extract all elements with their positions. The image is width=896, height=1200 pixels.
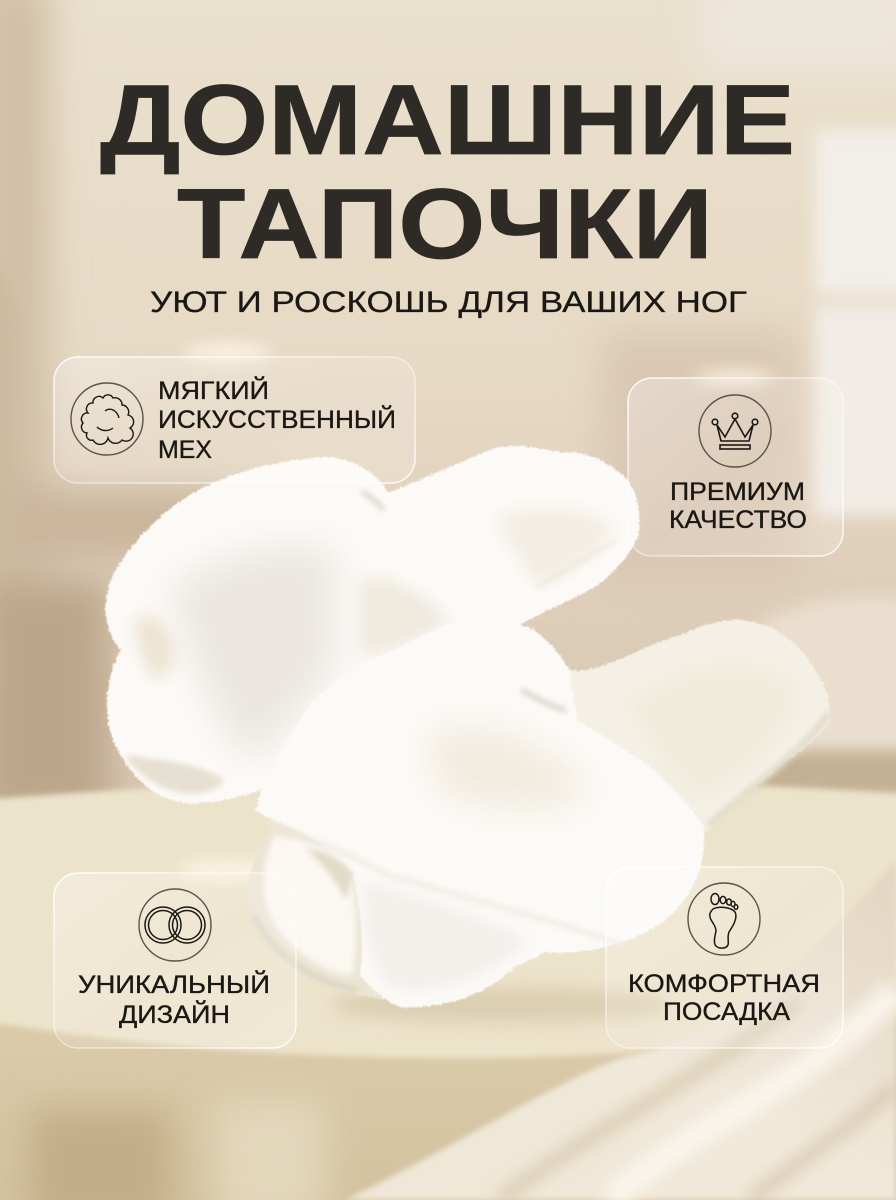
label: unique design (78, 969, 270, 1029)
back slipper footbed (495, 508, 612, 587)
icon: rings (139, 889, 211, 961)
back slipper toe shadow (136, 616, 175, 678)
back slipper textured strap (170, 546, 335, 760)
label: soft faux fur: ИСКУССТВЕННЫЙ (158, 404, 396, 434)
panel: unique design (54, 873, 296, 1048)
front slipper toe rim (254, 915, 358, 990)
icon: crown (699, 395, 771, 467)
label: unique design: ДИЗАЙН (119, 999, 230, 1029)
product: back slipper (106, 446, 640, 803)
front slipper toe gap (305, 848, 353, 900)
table surface (0, 780, 896, 1058)
back slipper sole (125, 755, 225, 794)
back slipper silhouette (106, 446, 640, 803)
label: comfortable fit (628, 970, 820, 1026)
label: soft faux fur: МЕХ (158, 436, 212, 464)
back slipper knot shadow (362, 492, 384, 510)
title (100, 64, 795, 279)
panel: soft faux fur (54, 357, 415, 483)
front slipper crossed straps (256, 620, 704, 1007)
front slipper knot shadow (522, 690, 566, 711)
title: ДОМАШНИЕ (100, 64, 795, 175)
front slipper footbed texture (630, 665, 800, 800)
draped cloth (345, 860, 896, 1200)
panel: premium quality (628, 378, 843, 556)
label: premium quality: ПРЕМИУМ (670, 478, 805, 506)
sofa (700, 597, 896, 770)
front slipper strap shading (428, 727, 590, 809)
label: premium quality (669, 478, 807, 534)
sparkle glows (178, 345, 775, 878)
label: comfortable fit: ПОСАДКА (663, 998, 790, 1026)
title: ТАПОЧКИ (177, 168, 713, 279)
front slipper sole rim (708, 712, 829, 826)
label: comfortable fit: КОМФОРТНАЯ (628, 970, 820, 998)
label: soft faux fur (158, 375, 396, 464)
icon: footprint (688, 883, 760, 955)
front slipper toe area (246, 827, 440, 1005)
label: premium quality: КАЧЕСТВО (669, 506, 807, 534)
subtitle: УЮТ И РОСКОШЬ ДЛЯ ВАШИХ НОГ (150, 286, 747, 319)
lower floor tone (0, 980, 896, 1200)
panel: comfortable fit (606, 867, 843, 1048)
label: unique design: УНИКАЛЬНЫЙ (78, 969, 270, 999)
label: soft faux fur: МЯГКИЙ (158, 375, 269, 405)
product: front slipper (246, 620, 830, 1007)
contact shadow (330, 987, 670, 1023)
front slipper sole and footbed (540, 620, 830, 831)
icon: fur tuft (71, 383, 143, 455)
